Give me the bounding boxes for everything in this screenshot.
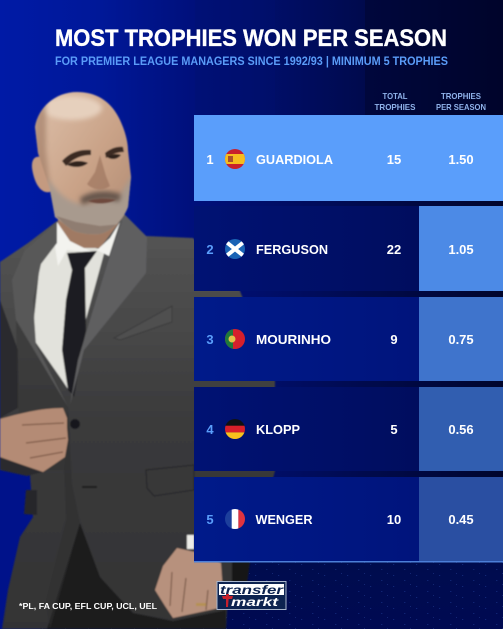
row 5: Wenger: 5 <box>206 512 214 527</box>
ear <box>32 157 54 192</box>
right lapel <box>70 210 147 405</box>
flag: France <box>225 509 245 529</box>
row 3: Mourinho: 9 <box>390 332 398 347</box>
row 5: Wenger: 0.45 <box>448 512 474 527</box>
row 2: Ferguson: 2 <box>206 242 214 257</box>
column headers: TROPHIES <box>441 92 482 101</box>
brows <box>62 150 91 166</box>
row 5: Wenger: 10 <box>387 512 401 527</box>
row 1: Guardiola: 1 <box>206 152 214 167</box>
coat tail <box>232 562 250 600</box>
flag: Scotland <box>225 239 245 259</box>
eyes <box>67 161 88 167</box>
nose <box>87 155 110 189</box>
row 2: Ferguson: 22 <box>387 242 401 257</box>
shirt cuff <box>187 535 194 549</box>
trousers <box>47 523 226 629</box>
left hand <box>0 408 68 472</box>
row 5: Wenger <box>194 477 503 562</box>
breast pocket <box>114 306 172 340</box>
title: MOST TROPHIES WON PER SEASON <box>55 25 447 52</box>
row 4: Klopp: KLOPP <box>256 422 300 437</box>
column headers: TOTAL <box>382 92 408 101</box>
flag: Spain <box>225 149 245 169</box>
subtitle: FOR PREMIER LEAGUE MANAGERS SINCE 1992/93 | MINIMUM 5 TROPHIES <box>55 54 448 68</box>
column headers <box>374 92 486 112</box>
row 4: Klopp: 5 <box>390 422 398 437</box>
row 3: Mourinho <box>194 297 503 381</box>
row 4: Klopp: 0.56 <box>448 422 474 437</box>
row 3: Mourinho: 3 <box>206 332 214 347</box>
row 1: Guardiola: GUARDIOLA <box>256 152 334 167</box>
jacket <box>0 210 275 629</box>
sleeve shadow <box>0 300 43 476</box>
photo: manager in suit <box>0 92 275 629</box>
flag: Portugal <box>225 329 245 349</box>
row 2: Ferguson <box>194 206 503 291</box>
logo: transfermarkt: transfer <box>220 585 284 597</box>
row 2: Ferguson: FERGUSON <box>256 242 328 257</box>
shirt <box>32 240 105 395</box>
row 2: Ferguson: 1.05 <box>448 242 474 257</box>
tie <box>62 251 97 397</box>
collar <box>54 222 120 266</box>
row 1: Guardiola: 1.50 <box>448 152 474 167</box>
hip pocket <box>146 465 194 496</box>
lower hand <box>155 548 224 618</box>
row 4: Klopp <box>194 387 503 471</box>
neck <box>58 205 122 248</box>
row 1: Guardiola: 15 <box>387 152 401 167</box>
column headers: TROPHIES <box>374 103 416 112</box>
front edge shading <box>46 407 80 629</box>
buttonhole <box>82 486 97 488</box>
logo: transfermarkt <box>217 582 286 610</box>
head highlight and shading <box>34 96 134 240</box>
wedding ring <box>196 603 206 606</box>
row 4: Klopp: 4 <box>206 422 214 437</box>
mouth <box>88 199 116 204</box>
left lapel <box>12 223 68 407</box>
side vent <box>24 490 37 515</box>
logo: transfermarkt: markt <box>231 597 280 609</box>
left jacket panel <box>16 320 70 470</box>
footnote: *PL, FA CUP, EFL CUP, UCL, UEL <box>19 601 157 611</box>
stubble <box>48 180 130 233</box>
button <box>70 419 80 429</box>
column headers: PER SEASON <box>436 103 486 112</box>
chin shadow <box>57 216 116 234</box>
flag: Germany <box>225 419 245 439</box>
row 1: Guardiola <box>194 115 503 201</box>
row 5: Wenger: WENGER <box>256 512 313 527</box>
row 3: Mourinho: 0.75 <box>448 332 474 347</box>
head <box>35 92 131 234</box>
row 3: Mourinho: MOURINHO <box>256 332 331 347</box>
